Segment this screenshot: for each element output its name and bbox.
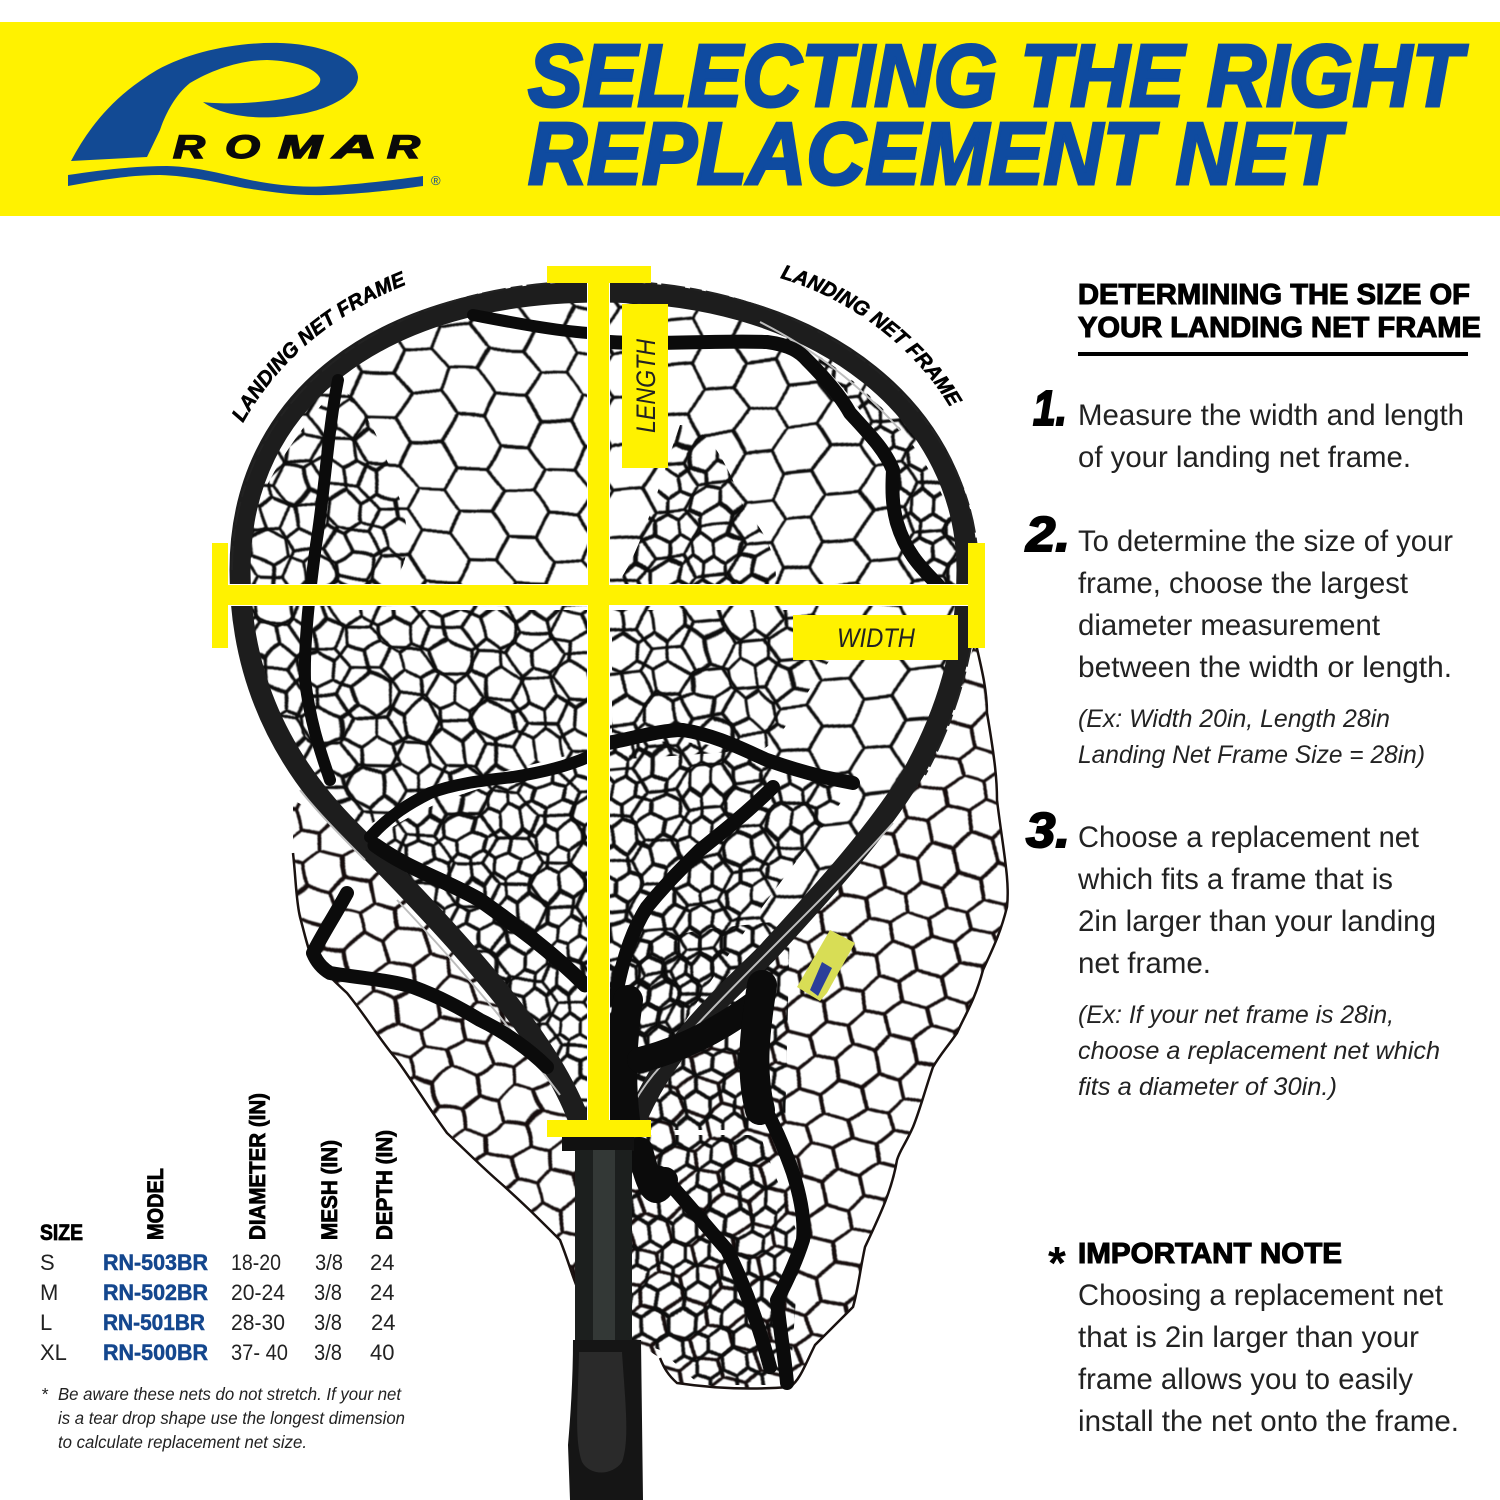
footnote: to calculate replacement net size. bbox=[58, 1432, 307, 1452]
step 3: 3. bbox=[1026, 804, 1070, 858]
net mesh: dense lower right centre bbox=[610, 742, 841, 1082]
step 1: Measure the width and length bbox=[1078, 399, 1464, 432]
length label: LENGTH bbox=[631, 339, 661, 433]
step 2 bbox=[1025, 508, 1453, 769]
table row L: 3/8 bbox=[314, 1310, 342, 1335]
step 3: choose a replacement net which bbox=[1078, 1037, 1440, 1065]
net mesh: bubble cluster bbox=[622, 425, 776, 584]
logo: Promar: ® bbox=[431, 173, 441, 188]
net mesh: dense centre right bbox=[612, 610, 829, 759]
table headers: MODEL bbox=[143, 1168, 168, 1240]
logo: Promar bbox=[68, 43, 441, 195]
handle shaft bbox=[562, 1137, 634, 1345]
width label: WIDTH bbox=[837, 623, 915, 653]
header banner bbox=[0, 22, 1500, 216]
curved label right: landing net frame: LANDING NET FRAME bbox=[780, 265, 963, 406]
table row M: M bbox=[40, 1280, 58, 1305]
important note: * bbox=[1048, 1237, 1066, 1289]
table row S: 3/8 bbox=[315, 1250, 343, 1275]
logo: Promar: R bbox=[387, 129, 420, 165]
important note: install the net onto the frame. bbox=[1078, 1405, 1459, 1438]
step 3: (Ex: If your net frame is 28in, bbox=[1078, 1001, 1394, 1029]
handle grip bbox=[568, 1340, 643, 1500]
table headers: SIZE bbox=[40, 1220, 83, 1245]
step 2: 2. bbox=[1025, 508, 1070, 562]
step 2: frame, choose the largest bbox=[1078, 567, 1409, 600]
table row L: L bbox=[40, 1310, 52, 1335]
step 3: 2in larger than your landing bbox=[1078, 905, 1436, 938]
step 2: Landing Net Frame Size = 28in) bbox=[1078, 741, 1425, 769]
logo: Promar: O bbox=[225, 129, 260, 165]
table row S: 18-20 bbox=[231, 1250, 281, 1275]
step 3 bbox=[1026, 804, 1440, 1101]
table row S: RN-503BR bbox=[103, 1250, 208, 1275]
net mesh: dense left side bbox=[250, 393, 587, 824]
step 3: fits a diameter of 30in.) bbox=[1078, 1073, 1337, 1101]
table row S bbox=[40, 1250, 394, 1275]
important note: IMPORTANT NOTE bbox=[1078, 1238, 1342, 1270]
logo: Promar: M bbox=[278, 129, 324, 165]
logo: Promar: R bbox=[173, 129, 205, 165]
step 2: diameter measurement bbox=[1078, 609, 1381, 642]
step 3: which fits a frame that is bbox=[1077, 863, 1393, 896]
step 1: of your landing net frame. bbox=[1078, 441, 1411, 474]
heading: determining the size: YOUR LANDING NET FRAME bbox=[1078, 312, 1481, 344]
yellow length and width measure bars bbox=[212, 266, 985, 1137]
important note bbox=[1048, 1237, 1459, 1438]
net mesh: dense lower left centre bbox=[386, 768, 587, 1112]
table row M: 3/8 bbox=[314, 1280, 342, 1305]
table headers bbox=[40, 1093, 397, 1245]
table headers: DEPTH (IN) bbox=[372, 1130, 397, 1240]
logo: Promar: A bbox=[331, 129, 377, 165]
title bbox=[528, 26, 1468, 203]
table row XL: 3/8 bbox=[314, 1340, 342, 1365]
table row M: 24 bbox=[370, 1280, 394, 1305]
table row XL: 40 bbox=[370, 1340, 394, 1365]
net outer edge bbox=[293, 640, 1008, 1388]
table row M bbox=[40, 1280, 394, 1305]
net mesh: below frame bbox=[632, 1135, 798, 1385]
table headers: DIAMETER (IN) bbox=[245, 1093, 270, 1240]
width label bbox=[793, 615, 958, 660]
landing net photo bbox=[166, 282, 1009, 1500]
size table bbox=[40, 1093, 397, 1365]
table row XL bbox=[40, 1340, 394, 1365]
table row L: 28-30 bbox=[231, 1310, 285, 1335]
net mesh: rim right bbox=[818, 356, 956, 584]
step 2: between the width or length. bbox=[1078, 651, 1452, 684]
heading: determining the size: DETERMINING THE SIZE OF bbox=[1078, 279, 1470, 311]
footnote: Be aware these nets do not stretch. If your net bbox=[58, 1384, 402, 1404]
step 3: Choose a replacement net bbox=[1078, 821, 1420, 854]
footnote: is a tear drop shape use the longest dimension bbox=[58, 1408, 405, 1428]
step 2: To determine the size of your bbox=[1078, 525, 1453, 558]
frame hoop bbox=[240, 292, 967, 1140]
table row XL: XL bbox=[40, 1340, 67, 1365]
important note: frame allows you to easily bbox=[1078, 1363, 1413, 1396]
table row XL: 37- 40 bbox=[231, 1340, 288, 1365]
step 1: 1. bbox=[1033, 382, 1067, 436]
table row L bbox=[40, 1310, 395, 1335]
table row S: 24 bbox=[370, 1250, 394, 1275]
step 1 bbox=[1033, 382, 1464, 474]
curved label left: landing net frame: LANDING NET FRAME bbox=[232, 270, 406, 424]
table headers: MESH (IN) bbox=[317, 1140, 342, 1240]
step 3: net frame. bbox=[1078, 947, 1211, 980]
title: REPLACEMENT NET bbox=[528, 104, 1346, 203]
footnote bbox=[41, 1384, 405, 1452]
mesh over frame hoop bbox=[232, 281, 978, 775]
frame highlight bbox=[300, 322, 900, 1110]
net mesh outside frame: left lobe bbox=[293, 802, 575, 1278]
net seam bands bbox=[305, 315, 938, 1383]
table row M: 20-24 bbox=[231, 1280, 285, 1305]
length label bbox=[622, 304, 668, 468]
important note: Choosing a replacement net bbox=[1078, 1279, 1444, 1312]
net mesh: dark knot area bbox=[610, 922, 790, 1130]
table row S: S bbox=[40, 1250, 55, 1275]
step 2: (Ex: Width 20in, Length 28in bbox=[1078, 705, 1390, 733]
table row L: RN-501BR bbox=[103, 1310, 205, 1335]
net mesh inside frame: open right cells bbox=[610, 302, 956, 1080]
net mesh inside frame: open left cells bbox=[250, 303, 587, 1103]
product tag bbox=[797, 930, 855, 1001]
table row XL: RN-500BR bbox=[103, 1340, 208, 1365]
table row M: RN-502BR bbox=[103, 1280, 208, 1305]
table row L: 24 bbox=[371, 1310, 395, 1335]
footnote: * bbox=[41, 1384, 49, 1404]
heading: determining the size bbox=[1078, 279, 1481, 356]
net mesh outside frame: right lobe bbox=[632, 648, 1006, 1388]
important note: that is 2in larger than your bbox=[1078, 1321, 1419, 1354]
